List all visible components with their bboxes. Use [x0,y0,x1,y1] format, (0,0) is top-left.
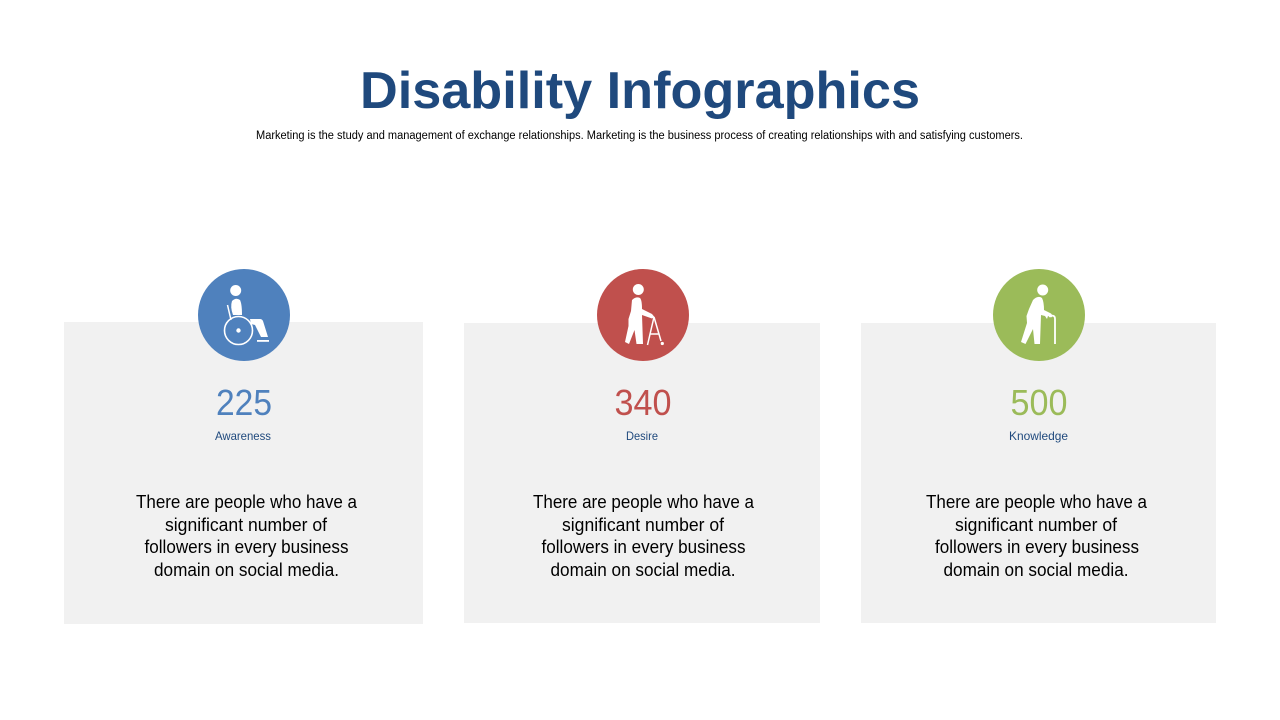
title: Disability Infographics [360,62,920,120]
description: significant number of [562,515,725,535]
number: 500 [1010,382,1068,423]
panel: desire [464,269,820,623]
description: significant number of [165,515,328,535]
description: followers in every business [935,537,1139,557]
description: significant number of [955,515,1118,535]
panel: knowledge [861,269,1216,623]
description: domain on social media. [550,560,736,580]
description [533,492,755,580]
description [926,492,1148,580]
icon: person with cane [993,269,1085,361]
description: followers in every business [542,537,746,557]
description: domain on social media. [154,560,339,580]
icon: wheelchair user [198,269,290,361]
description: domain on social media. [944,560,1128,580]
panel: awareness [64,269,423,624]
label: Desire [626,429,658,443]
label: Awareness [215,429,271,443]
description: followers in every business [144,537,348,557]
number: 225 [216,382,272,423]
label: Knowledge [1009,429,1068,443]
icon: person with walker [597,269,689,361]
description: There are people who have a [136,492,358,512]
subtitle: Marketing is the study and management of exchange relationships. Marketing is the business process of creating relationships with and satisfying customers. [256,130,1023,142]
description: There are people who have a [533,492,755,512]
number: 340 [614,382,672,423]
description: There are people who have a [926,492,1148,512]
description [136,492,358,580]
